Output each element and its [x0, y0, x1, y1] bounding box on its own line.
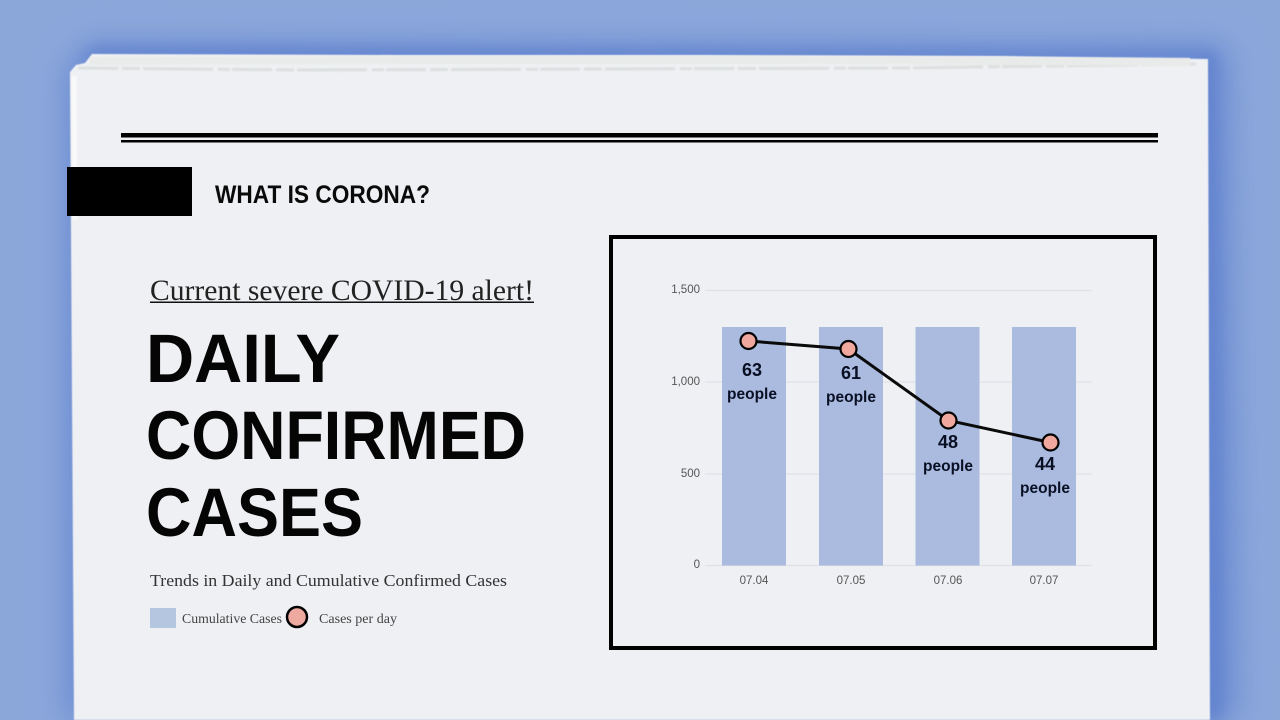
legend: cumulative label: Cumulative Cases [182, 612, 282, 627]
x axis labels: 07.04 [740, 575, 769, 587]
x axis labels: 07.06 [934, 575, 962, 587]
legend: daily marker [287, 607, 307, 627]
data labels: 61 [841, 363, 861, 383]
data labels: people [1020, 480, 1070, 497]
main title: CONFIRMED [146, 397, 526, 474]
x axis labels: 07.05 [837, 575, 865, 587]
y axis grid and labels: 1,500 [671, 284, 700, 296]
data labels [727, 360, 1070, 497]
data labels: people [923, 458, 973, 475]
y axis grid and labels: 0 [694, 559, 700, 571]
data labels: 48 [938, 432, 958, 452]
x axis labels: 07.07 [1030, 575, 1058, 587]
data labels: people [727, 386, 777, 403]
combo chart [671, 284, 1092, 587]
x axis labels [740, 575, 1058, 587]
legend [150, 607, 397, 628]
main title: DAILY [146, 320, 340, 397]
y axis grid and labels [671, 284, 1092, 571]
line markers [740, 333, 1058, 450]
alert subtitle: Current severe COVID-19 alert! [150, 274, 534, 307]
section heading: WHAT IS CORONA? [215, 181, 430, 209]
black label block [67, 167, 192, 216]
line: cases per day [748, 341, 1050, 442]
data labels: people [826, 389, 876, 406]
legend: daily label: Cases per day [319, 612, 397, 627]
double rule [121, 133, 1158, 142]
bars: cumulative cases [722, 327, 1076, 566]
main title [146, 320, 526, 551]
chart panel frame [611, 237, 1155, 648]
y axis grid and labels: 1,000 [671, 376, 700, 388]
legend: cumulative swatch [150, 608, 176, 628]
y axis grid and labels: 500 [681, 468, 700, 480]
main title: CASES [146, 474, 363, 551]
data labels: 44 [1035, 454, 1055, 474]
data labels: 63 [742, 360, 762, 380]
chart description: Trends in Daily and Cumulative Confirmed Cases [150, 571, 507, 590]
